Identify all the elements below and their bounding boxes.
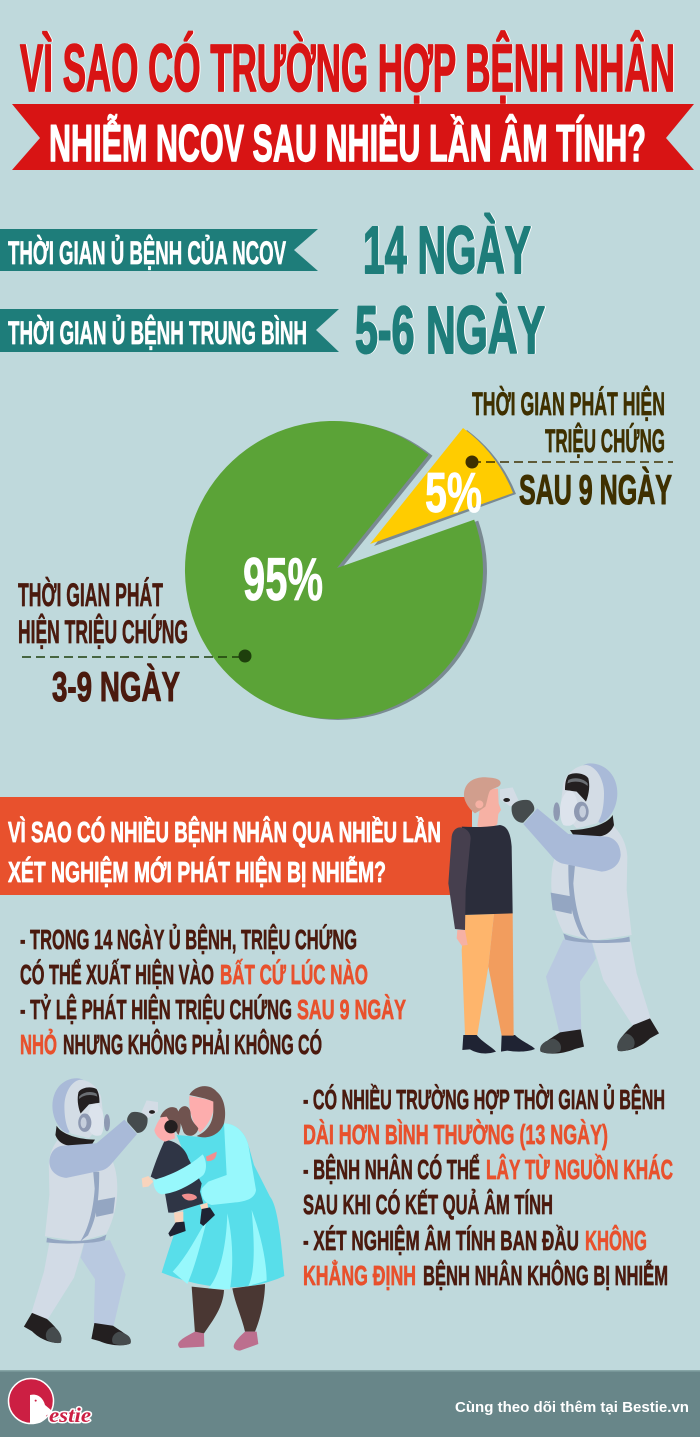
stat: 5-6 days: 5-6 NGÀY (355, 293, 545, 368)
title ribbon (12, 104, 694, 173)
logo: Bestie (8, 1378, 91, 1427)
panel: question band: XÉT NGHIỆM MỚI PHÁT HIỆN BỊ NHIỄM? (8, 855, 386, 889)
panel: question band (0, 797, 472, 895)
logo: Bestie: estie (49, 1403, 91, 1427)
text block: reasons 1: - TRONG 14 NGÀY Ủ BỆNH, TRIỆU CHỨNG (20, 923, 357, 955)
ribbon: average incubation label (0, 309, 339, 352)
callout: 95 percent slice: THỜI GIAN PHÁT (18, 577, 163, 613)
text block: reasons 2 (303, 1083, 673, 1291)
ribbon: ncov incubation label (0, 229, 318, 271)
callout: 5 percent slice (466, 386, 673, 513)
label: 5 percent: 5% (425, 461, 482, 525)
ribbon: ncov incubation label: THỜI GIAN Ủ BỆNH CỦA NCOV (8, 235, 286, 271)
footer text: Cùng theo dõi thêm tại Bestie.vn (455, 1400, 689, 1416)
text block: reasons 1: NHỎ (20, 1028, 57, 1060)
child (142, 1106, 217, 1237)
label: 95 percent: 95% (243, 546, 323, 613)
pie chart (185, 421, 516, 720)
text block: reasons 1: CÓ THỂ XUẤT HIỆN VÀO (20, 959, 214, 990)
callout: 95 percent slice: HIỆN TRIỆU CHỨNG (18, 614, 188, 650)
stat: 14 days: 14 NGÀY (363, 213, 531, 288)
hazmat worker mirrored (24, 1078, 158, 1345)
panel: question band: VÌ SAO CÓ NHIỀU BỆNH NHÂN QUA NHIỀU LẦN (8, 815, 441, 849)
text block: reasons 1 (20, 923, 406, 1060)
footer bar (0, 1370, 700, 1437)
text block: reasons 2: - BỆNH NHÂN CÓ THỂ (303, 1154, 480, 1185)
callout: 95 percent slice: 3-9 NGÀY (52, 663, 180, 710)
ribbon: average incubation label: THỜI GIAN Ủ BỆNH TRUNG BÌNH (8, 315, 307, 351)
man (448, 777, 535, 1053)
text block: reasons 1: SAU 9 NGÀY (297, 994, 406, 1025)
illustration: hazmat worker testing child held by mother (24, 1078, 284, 1351)
text block: reasons 2: KHÔNG (585, 1224, 647, 1256)
callout: 95 percent slice (18, 577, 252, 710)
text block: reasons 1: BẤT CỨ LÚC NÀO (220, 959, 368, 990)
hazmat worker (500, 763, 659, 1054)
text block: reasons 2: KHẲNG ĐỊNH (303, 1260, 416, 1291)
mother (162, 1086, 284, 1351)
text block: reasons 1: - TỶ LỆ PHÁT HIỆN TRIỆU CHỨNG (20, 993, 292, 1025)
text block: reasons 1: NHƯNG KHÔNG PHẢI KHÔNG CÓ (63, 1028, 322, 1060)
illustration: man being tested by hazmat worker (448, 763, 659, 1054)
